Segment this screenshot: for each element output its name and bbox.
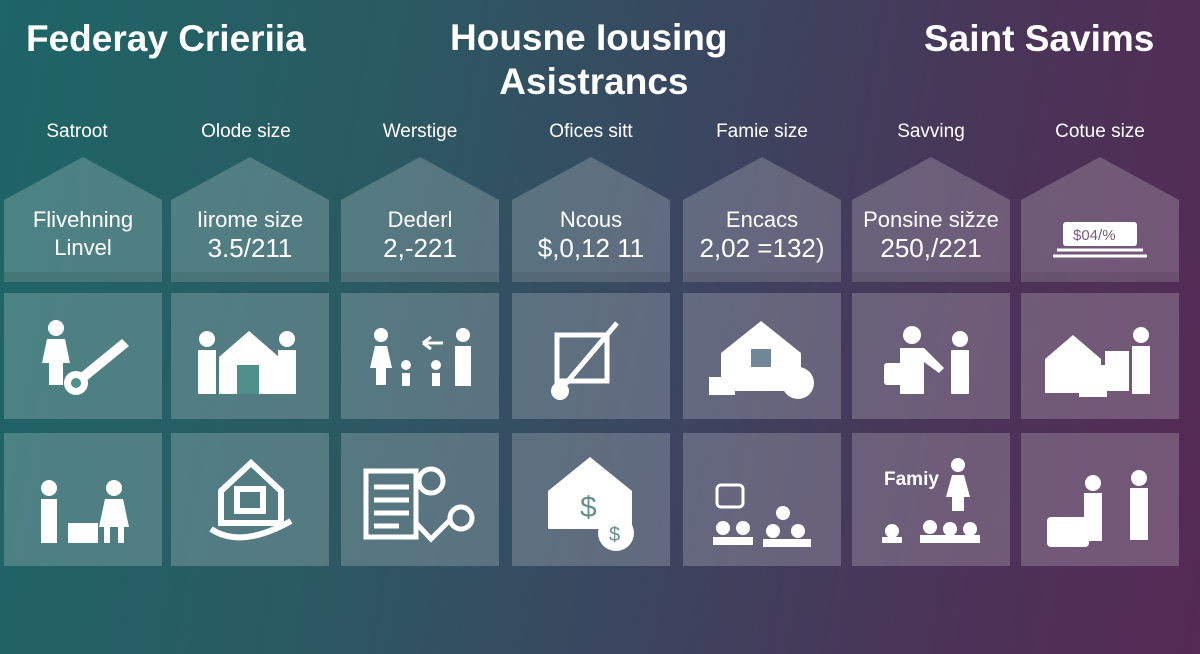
header labels: Cotue size xyxy=(1055,121,1145,142)
text box 4 xyxy=(512,200,670,282)
header labels: Ofices sitt xyxy=(549,121,633,142)
text box 2: Iirome size xyxy=(197,207,303,232)
text box 2 xyxy=(171,200,329,282)
header labels: Savving xyxy=(897,121,965,142)
column 1 xyxy=(4,157,162,566)
icon: hand house xyxy=(171,433,329,566)
text box 6: 250,/221 xyxy=(880,233,982,263)
column 5 xyxy=(683,157,841,566)
text box 4: Ncous xyxy=(560,207,622,232)
column 3 xyxy=(341,157,499,566)
text box 1: Flivehning xyxy=(33,207,133,232)
header labels: Werstige xyxy=(383,121,457,142)
text box 7 xyxy=(1021,200,1179,282)
icon: people group xyxy=(683,433,841,566)
text box 3: Dederl xyxy=(388,207,452,232)
text box 5: Encacs xyxy=(726,207,798,232)
text box 5 xyxy=(683,200,841,282)
icon: family xyxy=(341,293,499,419)
text box 1 xyxy=(4,200,162,282)
header labels: Famie size xyxy=(716,121,808,142)
title left: Federay Crieriia xyxy=(26,18,306,59)
icon: house dollar xyxy=(512,433,670,566)
header labels: Satroot xyxy=(46,121,108,142)
text box 1: Linvel xyxy=(54,235,112,260)
icon: house dollar: $ xyxy=(609,524,620,546)
icon: people house xyxy=(171,293,329,419)
icon: person key xyxy=(4,293,162,419)
icon: checklist xyxy=(341,433,499,566)
icon: handshake xyxy=(852,293,1010,419)
icon: family money: Famiy xyxy=(884,469,939,490)
icon: family money xyxy=(852,433,1010,566)
text box 6 xyxy=(852,200,1010,282)
text box 7: $04/% xyxy=(1073,227,1116,244)
title center: Asistrancs xyxy=(499,61,688,102)
column 7 xyxy=(1021,157,1179,566)
title center xyxy=(450,17,728,102)
column 4 xyxy=(512,157,670,566)
icon: house documents xyxy=(1021,293,1179,419)
text box 5: 2,02 =132) xyxy=(699,233,825,263)
icon: gavel xyxy=(512,293,670,419)
text box 3 xyxy=(341,200,499,282)
title right: Saint Savims xyxy=(924,18,1154,59)
text box 2: 3.5/211 xyxy=(208,233,292,263)
text box 4: $,0,12 11 xyxy=(538,233,644,263)
header labels xyxy=(46,121,1145,142)
text box 3: 2,-221 xyxy=(383,233,457,263)
header labels: Olode size xyxy=(201,121,291,142)
icon: handshake card xyxy=(1021,433,1179,566)
icon: people basket xyxy=(4,433,162,566)
text box 6: Ponsine sižze xyxy=(863,207,999,232)
title center: Housne Iousing xyxy=(450,17,728,58)
icon: house money xyxy=(683,293,841,419)
column 6 xyxy=(852,157,1010,566)
column 2 xyxy=(171,157,329,566)
icon: house dollar: $ xyxy=(580,491,597,524)
